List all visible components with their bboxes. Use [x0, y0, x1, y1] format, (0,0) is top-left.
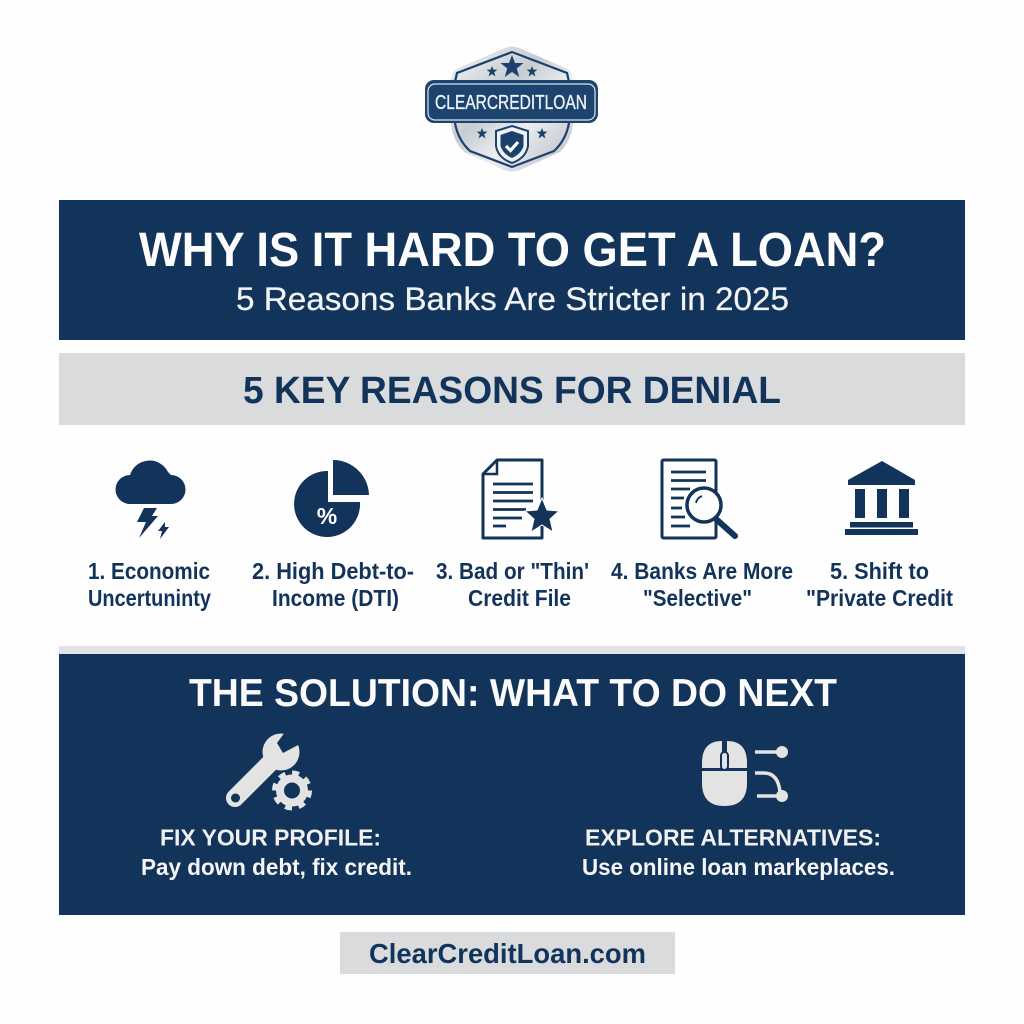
label: "Selective": [643, 585, 752, 611]
icon: wrench and gear: [231, 728, 310, 808]
icon: document with star: [483, 460, 559, 538]
label: Income (DTI): [272, 585, 399, 611]
label: "Private Credit: [806, 585, 953, 611]
title banner: [59, 200, 965, 340]
icon: mouse with connectors: [702, 741, 788, 806]
solution 1: fix your profile: Pay down debt, fix credit.: [141, 854, 412, 880]
icon: storm cloud: [116, 461, 186, 539]
solution 2: explore alternatives: Use online loan markeplaces.: [582, 854, 895, 880]
label: 1. Economic: [88, 558, 210, 584]
reason 3: bad or thin credit file: [436, 460, 589, 611]
icon: pie chart with percent: %: [317, 503, 337, 529]
subtitle: 5 Reasons Banks Are Stricter in 2025: [236, 281, 789, 317]
shield body: [451, 46, 573, 172]
solution 2: explore alternatives: [582, 741, 895, 880]
label: 2. High Debt-to-: [252, 558, 414, 584]
reason 5: shift to private credit: [806, 461, 953, 611]
label: [252, 558, 414, 611]
small shield with check: [496, 126, 528, 163]
solution 1: fix your profile: [141, 728, 412, 880]
heading and description: FIX YOUR PROFILE:: [160, 824, 381, 850]
logo banner: [425, 80, 598, 123]
footer website: [340, 932, 675, 974]
shield outline: [455, 52, 569, 167]
solution panel: [59, 654, 965, 915]
icon: document with magnifier: [662, 460, 735, 538]
label: Credit File: [468, 585, 571, 611]
section heading: 5 KEY REASONS FOR DENIAL: [243, 370, 781, 412]
icon: bank building: [845, 461, 918, 535]
logo name: CLEARCREDITLOAN: [435, 92, 587, 114]
label: [806, 558, 953, 611]
heading and description: EXPLORE ALTERNATIVES:: [585, 824, 881, 850]
main title: WHY IS IT HARD TO GET A LOAN?: [139, 223, 886, 277]
logo stars: [476, 55, 548, 138]
footer website: ClearCreditLoan.com: [369, 938, 646, 969]
label: [88, 558, 211, 611]
label: Uncertuninty: [88, 585, 211, 611]
solution heading: THE SOLUTION: WHAT TO DO NEXT: [189, 672, 837, 715]
reason 4: banks are more selective: [611, 460, 793, 611]
label: 4. Banks Are More: [611, 558, 793, 584]
reason 1: economic uncertainty: [88, 461, 211, 611]
section heading band: [59, 353, 965, 425]
label: 5. Shift to: [830, 558, 929, 584]
icon: pie chart with percent: [294, 460, 369, 537]
label: [611, 558, 793, 611]
reason 2: high debt-to-income: [252, 460, 414, 611]
logo badge: [425, 46, 598, 172]
label: 3. Bad or "Thin': [436, 558, 589, 584]
label: [436, 558, 589, 611]
